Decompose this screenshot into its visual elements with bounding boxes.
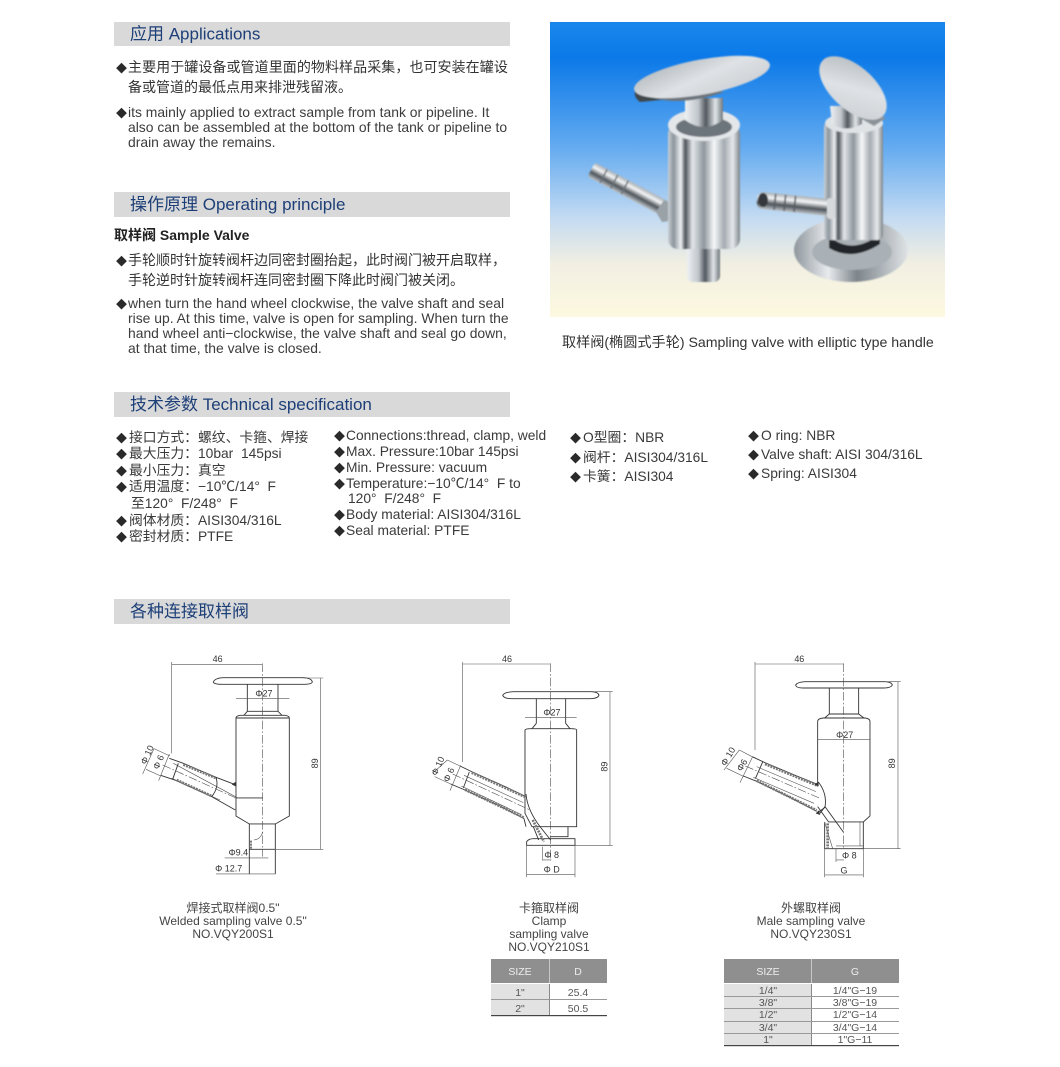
- table: male thread sizes: 3/8"G−19: [833, 997, 877, 1009]
- spec list: seal parts Chinese: ◆: [570, 452, 581, 465]
- spec list: seal parts English: ◆: [748, 449, 759, 462]
- spec list: seal parts Chinese: 阀杆：AISI304/316L: [583, 450, 708, 465]
- spec list: Chinese: ◆: [116, 465, 127, 478]
- spec list: Chinese: 密封材质：PTFE: [129, 528, 233, 544]
- technical drawing: male thread valve: Φ 10: [719, 745, 737, 768]
- spec list: Chinese: ◆: [116, 448, 127, 461]
- text block: applications English: its mainly applied to extract sample from tank or pipeline. It: [128, 104, 489, 120]
- spec list: Chinese: 最小压力：真空: [129, 463, 226, 478]
- photo caption: 取样阀(椭圆式手轮) Sampling valve with elliptic type handle: [562, 334, 934, 350]
- technical drawing: clamp valve: 46: [502, 654, 512, 664]
- text block: applications English: ◆: [116, 107, 127, 120]
- caption: male valve: NO.VQY230S1: [770, 927, 852, 941]
- spec list: seal parts Chinese: ◆: [570, 471, 581, 484]
- spec list: English: Temperature:−10℃/14° F to: [346, 476, 521, 491]
- photo: sampling valves on blue gradient: [550, 22, 945, 317]
- technical drawing: male thread valve: 46: [794, 654, 804, 664]
- text block: applications Chinese: 备或管道的最低点用来排泄残留液。: [128, 79, 352, 95]
- text block: applications Chinese: [116, 59, 508, 95]
- table: clamp sizes: 2": [515, 1003, 525, 1015]
- technical drawing: welded valve: 89: [310, 758, 320, 768]
- spec list: Chinese: ◆: [116, 531, 127, 544]
- table: male thread sizes: 3/4": [759, 1022, 777, 1034]
- spec list: seal parts English: O ring: NBR: [761, 428, 835, 443]
- technical drawing: clamp valve: Φ27: [543, 708, 561, 718]
- text block: operating English: rise up. At this time, valve is open for sampling. When turn the: [128, 310, 509, 326]
- text block: applications Chinese: 主要用于罐设备或管道里面的物料样品采集，也可安装在罐设: [128, 59, 508, 75]
- spec list: seal parts English: Spring: AISI304: [761, 466, 857, 481]
- text block: operating English: [116, 295, 509, 356]
- spec list: seal parts English: Valve shaft: AISI 304/316L: [761, 447, 923, 462]
- table: clamp sizes: 50.5: [568, 1003, 588, 1015]
- table: clamp sizes: 25.4: [568, 987, 588, 999]
- heading: Operating principle: [114, 192, 510, 217]
- caption: welded valve: [159, 900, 307, 941]
- text block: operating Chinese: 手轮顺时针旋转阀杆边同密封圈抬起，此时阀门被开启取样，: [128, 252, 506, 268]
- table: male thread sizes: 1/4": [759, 985, 777, 997]
- text block: applications English: drain away the remains.: [128, 134, 275, 150]
- subheading: Sample Valve: 取样阀 Sample Valve: [114, 227, 250, 243]
- spec list: Chinese: 接口方式：螺纹、卡箍、焊接: [129, 429, 309, 445]
- text block: operating English: hand wheel anti−clockwise, the valve shaft and seal go down,: [128, 325, 507, 341]
- heading: Applications: 应用 Applications: [130, 24, 260, 44]
- technical drawing: welded valve: Φ 6: [151, 753, 166, 771]
- caption: welded valve: Welded sampling valve 0.5": [159, 914, 307, 928]
- spec list: seal parts English: ◆: [748, 468, 759, 481]
- caption: welded valve: 焊接式取样阀0.5": [187, 900, 279, 915]
- table: male thread sizes: 1/4"G−19: [833, 985, 877, 997]
- table: male thread sizes: SIZE: [756, 966, 780, 978]
- caption: clamp valve: Clamp: [532, 914, 567, 928]
- table: male thread sizes: G: [851, 966, 859, 978]
- spec list: seal parts English: [748, 428, 923, 481]
- spec list: English: Max. Pressure:10bar 145psi: [346, 444, 519, 459]
- table: male thread sizes: 3/8": [759, 997, 777, 1009]
- technical drawing: male thread valve: Φ 8: [842, 850, 857, 860]
- caption: male valve: [757, 900, 866, 941]
- technical drawing: male thread valve: Φ27: [836, 730, 853, 740]
- spec list: English: ◆: [334, 446, 345, 459]
- spec list: English: ◆: [334, 525, 345, 538]
- caption: clamp valve: 卡箍取样阀: [519, 900, 579, 915]
- spec list: seal parts Chinese: ◆: [570, 432, 581, 445]
- spec list: Chinese: 至120° F/248° F: [131, 496, 238, 511]
- technical drawing: welded valve: Φ 10: [139, 744, 156, 766]
- spec list: Chinese: ◆: [116, 432, 127, 445]
- text block: operating Chinese: ◆: [116, 255, 127, 268]
- heading: Technical specification: 技术参数 Technical specification: [130, 395, 372, 414]
- spec list: seal parts Chinese: [570, 430, 708, 484]
- text block: applications Chinese: ◆: [116, 62, 127, 75]
- table: male thread sizes: 1/2": [759, 1009, 777, 1021]
- caption: clamp valve: NO.VQY210S1: [508, 940, 590, 954]
- table: clamp sizes: D: [574, 966, 582, 978]
- technical drawing: clamp valve: Φ 10: [429, 755, 446, 777]
- text block: applications English: also can be assembled at the bottom of the tank or pipeline to: [128, 119, 507, 135]
- caption: male valve: Male sampling valve: [757, 914, 866, 928]
- text block: operating Chinese: 手轮逆时针旋转阀杆连同密封圈下降此时阀门被关闭。: [128, 272, 464, 288]
- spec list: English: ◆: [334, 478, 345, 491]
- spec list: English: ◆: [334, 509, 345, 522]
- valve left: [587, 47, 773, 282]
- technical drawing: welded valve: Φ9.4: [228, 847, 248, 857]
- spec list: seal parts Chinese: O型圈：NBR: [583, 430, 664, 445]
- spec list: English: Body material: AISI304/316L: [346, 507, 521, 522]
- table: male thread sizes: 1/2"G−14: [833, 1009, 877, 1021]
- spec list: Chinese: 最大压力：10bar 145psi: [129, 446, 282, 461]
- heading: connection types: 各种连接取样阀: [130, 602, 249, 621]
- technical drawing: clamp valve: Φ D: [544, 864, 560, 874]
- table: clamp sizes: SIZE: [508, 966, 532, 978]
- spec list: seal parts English: ◆: [748, 430, 759, 443]
- spec list: English: Seal material: PTFE: [346, 523, 469, 538]
- technical drawing: clamp valve: 89: [599, 762, 609, 772]
- technical drawing: welded valve: Φ27: [255, 689, 273, 699]
- table: clamp sizes: [491, 959, 607, 1016]
- caption: male valve: 外螺取样阀: [781, 900, 841, 915]
- valve right: [756, 45, 908, 282]
- text block: operating English: when turn the hand wheel clockwise, the valve shaft and seal: [127, 295, 504, 311]
- caption: clamp valve: sampling valve: [509, 927, 589, 941]
- table: male thread sizes: 1"G−11: [838, 1034, 873, 1046]
- heading: connection types: [114, 599, 510, 624]
- spec list: English: ◆: [334, 430, 345, 443]
- spec list: Chinese: 阀体材质：AISI304/316L: [129, 513, 282, 528]
- spec list: Chinese: 适用温度：−10℃/14° F: [129, 479, 276, 494]
- text block: applications English: [116, 104, 507, 150]
- technical drawing: male thread valve: [719, 654, 901, 877]
- technical drawing: male thread valve: 89: [887, 758, 897, 768]
- table: male thread sizes: 3/4"G−14: [833, 1022, 877, 1034]
- technical drawing: male thread valve: Φ6: [735, 757, 749, 773]
- text block: operating English: ◆: [116, 298, 127, 311]
- spec list: English: 120° F/248° F: [348, 491, 441, 506]
- technical drawing: clamp valve: [429, 654, 613, 877]
- heading: Technical specification: [114, 392, 510, 417]
- spec list: English: Min. Pressure: vacuum: [346, 460, 487, 475]
- technical drawing: male thread valve: G: [840, 865, 847, 875]
- spec list: English: ◆: [334, 462, 345, 475]
- table: male thread sizes: 1": [763, 1034, 773, 1046]
- text block: operating English: at that time, the valve is closed.: [128, 340, 322, 356]
- technical drawing: clamp valve: Φ 6: [441, 766, 456, 784]
- spec list: Chinese: ◆: [116, 481, 127, 494]
- heading: Operating principle: 操作原理 Operating principle: [130, 195, 345, 214]
- heading: Applications: [114, 22, 510, 46]
- spec list: seal parts Chinese: 卡簧：AISI304: [583, 469, 674, 484]
- technical drawing: welded valve: Φ 12.7: [215, 863, 242, 873]
- spec list: English: [334, 428, 546, 538]
- text block: operating Chinese: [116, 252, 506, 288]
- technical drawing: clamp valve: Φ 8: [544, 850, 559, 860]
- caption: welded valve: NO.VQY200S1: [192, 927, 274, 941]
- table: clamp sizes: 1": [515, 987, 525, 999]
- spec list: Chinese: ◆: [116, 515, 127, 528]
- spec list: Chinese: [116, 429, 309, 544]
- spec list: English: Connections:thread, clamp, weld: [346, 428, 546, 443]
- table: male thread sizes: [724, 959, 899, 1046]
- caption: clamp valve: [508, 900, 590, 954]
- technical drawing: welded valve: [139, 654, 323, 874]
- technical drawing: welded valve: 46: [213, 654, 223, 664]
